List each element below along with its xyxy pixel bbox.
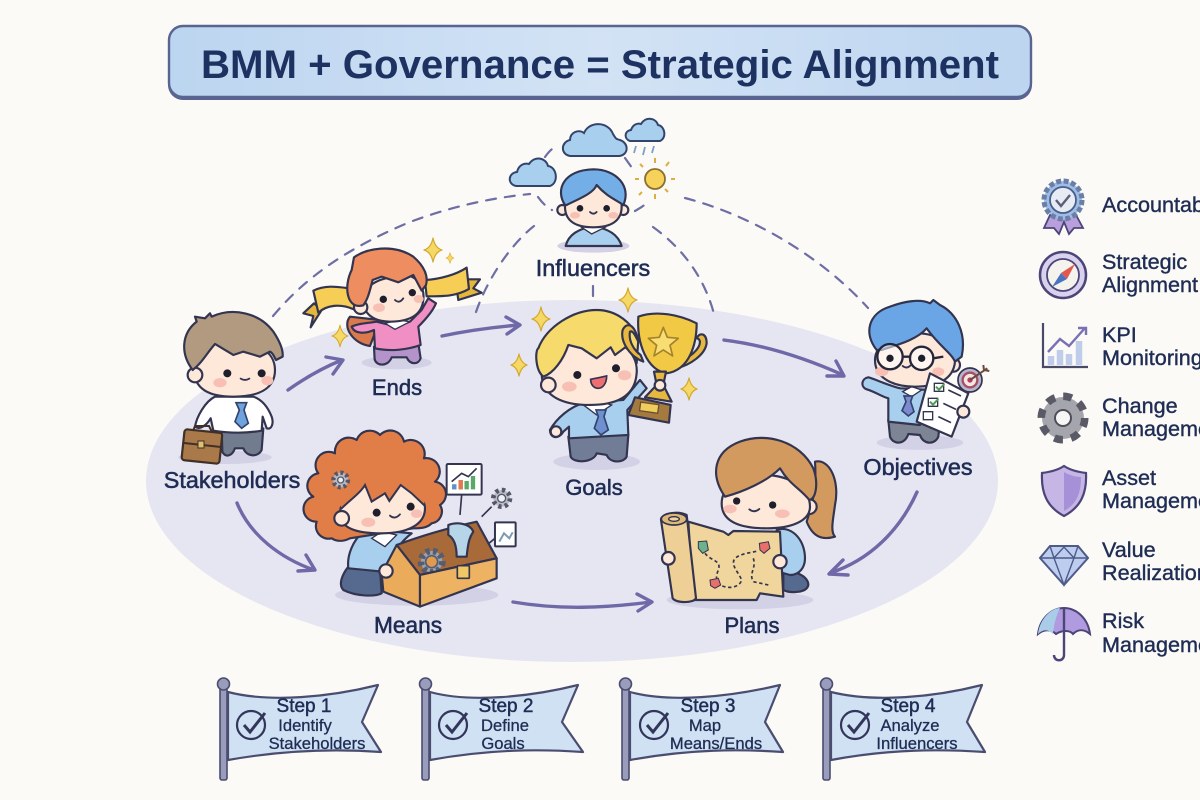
character: plans with map [661, 438, 836, 609]
label: Means: Means [374, 612, 442, 638]
flow arrows [237, 317, 917, 611]
character: goals with trophy [536, 310, 707, 470]
legend item: KPI Monitoring: KPI [1102, 322, 1137, 347]
flag: step 4: Step 4 [881, 696, 936, 717]
legend item: Risk Management [1038, 608, 1200, 660]
flag: step 1: Step 1 [277, 696, 331, 717]
legend item: Accountability [1044, 181, 1200, 234]
goals group [511, 288, 707, 500]
influencers group [510, 119, 675, 281]
stakeholders group [164, 312, 300, 493]
flag: step 2 [420, 678, 583, 780]
icon: sparkles [511, 288, 697, 400]
flag: step 4: Influencers [876, 734, 958, 753]
objectives group [862, 300, 989, 480]
legend item: Value Realization [1040, 537, 1200, 585]
title banner: BMM + Governance = Strategic Alignment [201, 42, 999, 87]
legend item: Strategic Alignment: Alignment [1102, 272, 1198, 297]
legend item: Asset Management: Asset [1102, 465, 1156, 490]
character: influencer [557, 169, 629, 253]
step flags [218, 678, 985, 780]
flag: step 2: Step 2 [479, 696, 533, 717]
legend item: KPI Monitoring [1043, 322, 1200, 370]
flag: step 3: Step 3 [681, 696, 735, 717]
legend item: Change Management [1042, 393, 1200, 441]
flag: step 2: Goals [481, 734, 525, 753]
flag: step 2: Define [481, 716, 529, 735]
dashed influence arcs [273, 146, 868, 316]
flag: step 1: Stakeholders [269, 734, 365, 753]
label: Objectives: Objectives [863, 454, 973, 480]
flag: step 1: Identify [278, 716, 332, 735]
legend item: Strategic Alignment: Strategic [1102, 249, 1187, 274]
icon: sparkles [332, 238, 454, 347]
character: ends with ribbon [303, 248, 482, 369]
legend item: Strategic Alignment [1040, 249, 1198, 298]
label: Stakeholders: Stakeholders [164, 467, 300, 493]
ends group [303, 238, 482, 400]
label: Plans: Plans [724, 613, 780, 638]
character: stakeholder [178, 312, 283, 464]
legend item: Change Management: Change [1102, 393, 1178, 418]
label: Goals: Goals [565, 475, 623, 500]
legend item: KPI Monitoring: Monitoring [1102, 345, 1200, 370]
title banner [168, 26, 1032, 100]
icon: briefcase [181, 426, 222, 464]
flag: step 4: Analyze [880, 716, 940, 735]
flag: step 3: Map [689, 716, 721, 735]
flag: step 4 [820, 678, 985, 780]
legend item: Risk Management: Risk [1102, 608, 1144, 633]
label: Influencers: Influencers [536, 255, 650, 281]
legend item: Asset Management [1042, 465, 1200, 516]
legend column [1038, 181, 1200, 660]
flag: step 1 [218, 678, 381, 780]
label: Ends: Ends [372, 375, 422, 400]
flag: step 3: Means/Ends [670, 734, 762, 753]
flag: step 3 [620, 678, 783, 780]
central ellipse platform [146, 300, 998, 662]
character: means with toolbox [304, 430, 516, 607]
icon: clouds and sun [510, 119, 675, 199]
character: objectives [862, 300, 989, 450]
legend item: Value Realization: Value [1102, 537, 1156, 562]
means group [304, 430, 516, 638]
plans group [661, 438, 836, 638]
